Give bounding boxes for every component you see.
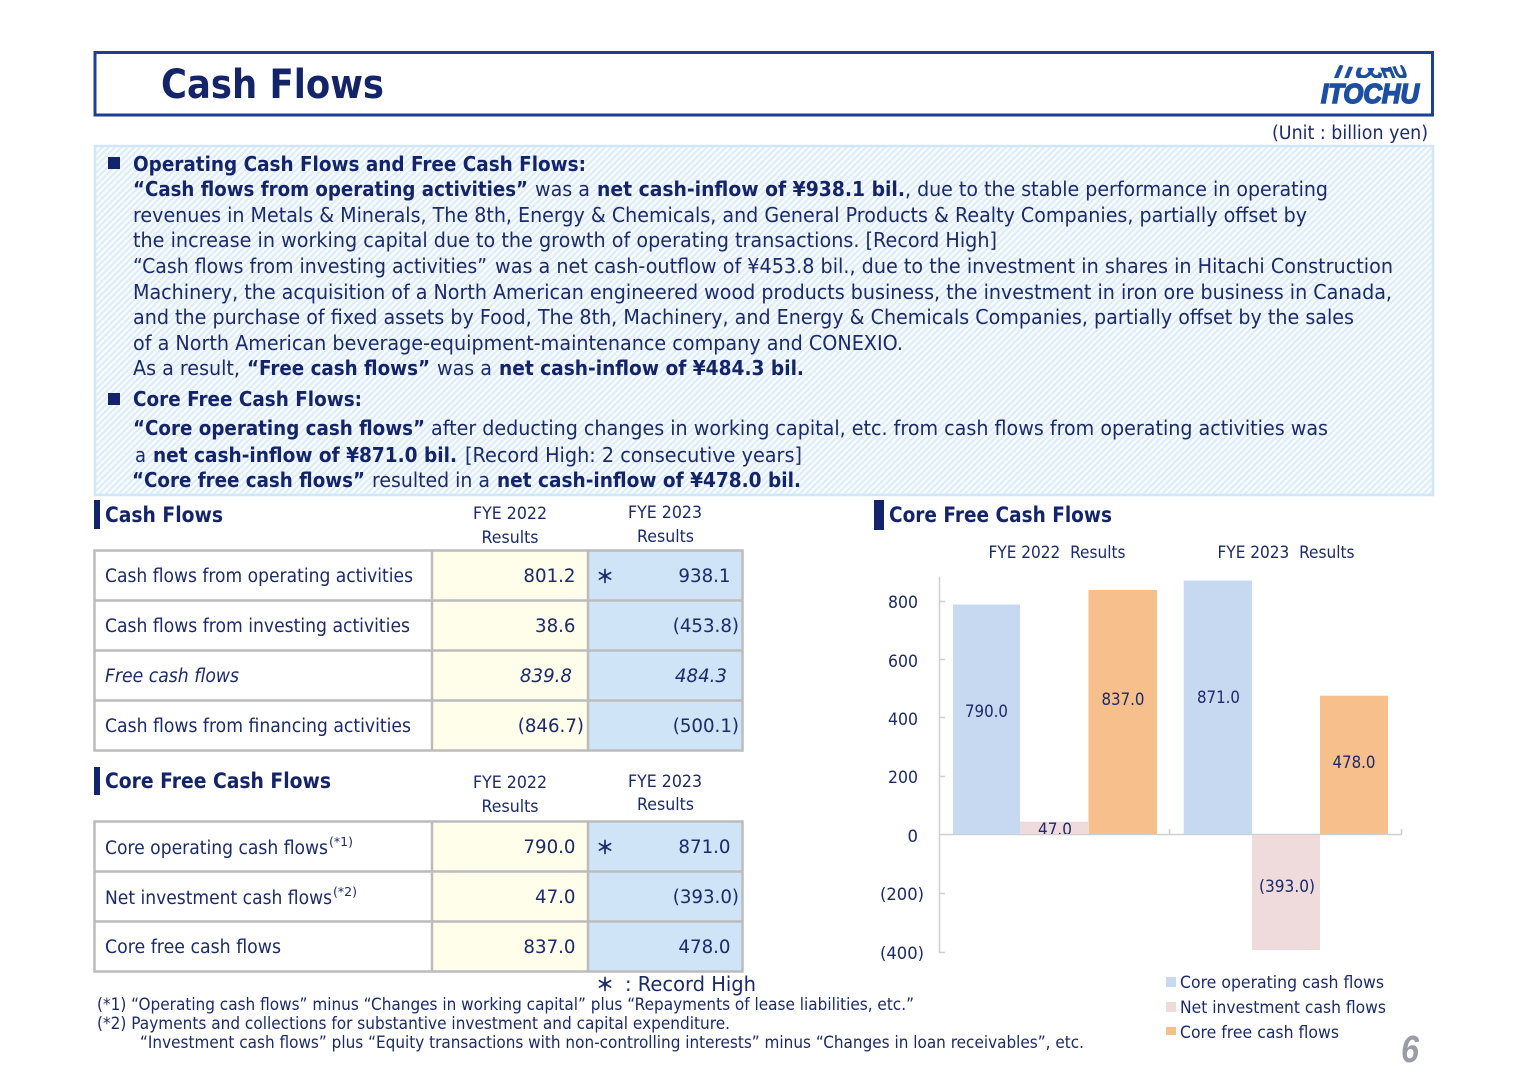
row: free cash flows: 839.8 [520,666,572,687]
row: operating: Cash flows from operating activities [105,566,413,587]
paragraph: core free cash flows: resulted in a [372,468,490,492]
logo: ITOCHU: ITO [1331,58,1379,84]
paragraph: operating and free cash flows: net cash-inflow of ¥938.1 bil. [597,177,905,201]
footnotes: “Investment cash flows” plus “Equity transactions with non-controlling interests” minus “Changes in loan receivables”, etc. [140,1033,1084,1052]
heading: operating and free cash flows: Operating Cash Flows and Free Cash Flows: [133,152,586,176]
paragraph: operating and free cash flows: of a North American beverage-equipment-maintenance company and CONEXIO. [133,331,903,355]
paragraph: operating and free cash flows: and the purchase of fixed assets by Food, The 8th, Machinery, and Energy & Chemicals Companies, partially offset by the sales [133,305,1354,329]
bar: FYE 2022 core free: 837.0 [1102,690,1144,709]
bar: FYE 2023 core operating: 871.0 [1197,688,1240,707]
column header: FYE 2022 [473,504,547,547]
row: operating [105,563,730,589]
paragraph: core free cash flows: after deducting changes in working capital, etc. from cash flows from operating activities was [431,416,1328,440]
row: investing: (453.8) [673,616,739,637]
bar: FYE 2023 core free: 478.0 [1332,753,1376,772]
bar: FYE 2023 net investment: (393.0) [1259,877,1315,896]
title banner [95,52,1432,115]
bar: FYE 2023 core free [1320,696,1388,834]
heading: cash flows table: Cash Flows [105,503,223,527]
column header: FYE 2022: FYE 2022 [473,773,547,792]
bar: FYE 2023 core operating [1184,580,1252,834]
row: free cash flows [105,666,727,687]
row: investing: Cash flows from investing activities [105,616,410,637]
row: core operating [105,834,730,860]
paragraph: operating and free cash flows: the increase in working capital due to the growth of operating transactions. [Record High] [133,228,997,252]
row: core operating: 790.0 [523,837,576,858]
panel: summary text [95,146,1433,495]
paragraph: operating and free cash flows: net cash-inflow of ¥484.3 bil. [499,356,804,380]
column header: FYE 2022: Results [482,528,538,547]
row: core operating: Core operating cash flows [105,838,328,859]
table: core free cash flows [94,821,743,972]
heading: core free cash flows: Core Free Cash Flows: [133,387,362,411]
footnotes: (*1) “Operating cash flows” minus “Changes in working capital” plus “Repayments of lease liabilities, etc.” [97,995,914,1014]
column header: FYE 2023 [628,772,702,814]
title: Cash Flows [161,62,384,108]
legend: core operating: Core operating cash flows [1180,973,1384,992]
column header: FYE 2023: FYE 2023 [628,772,702,791]
bar: FYE 2022 core operating [953,604,1020,834]
row: core free: 837.0 [523,937,576,958]
row: net investment: (393.0) [673,887,739,908]
legend: core free: Core free cash flows [1180,1023,1339,1042]
row: investing: 38.6 [535,616,576,637]
y axis: 400 [888,710,918,729]
column header: FYE 2023 [628,503,702,546]
paragraph: operating and free cash flows: revenues in Metals & Minerals, The 8th, Energy & Chemicals, and General Products & Realty Companies, partially offset by [133,203,1307,227]
row: core operating: ＊ [596,834,614,860]
row: core operating: 871.0 [678,837,730,858]
paragraph: operating and free cash flows: was a net cash-outflow of ¥453.8 bil., due to the investment in shares in Hitachi Construction [495,254,1393,278]
y axis [880,577,1402,963]
footnotes [97,995,1084,1052]
column header: FYE 2022: FYE 2022 [473,504,547,523]
y axis: (400) [880,944,924,963]
legend: net investment: Net investment cash flows [1180,998,1386,1017]
heading: core free cash flows chart [874,500,1112,530]
bar: FYE 2022 core free [1088,590,1157,834]
paragraph: core free cash flows: net cash-inflow of ¥478.0 bil. [497,468,801,492]
bar: FYE 2023 net investment [1252,835,1320,950]
record high note: ＊ [596,971,614,997]
logo: ITOCHU: ITOCHU [1321,78,1420,109]
table: cash flows [94,550,743,750]
heading: core free cash flows table: Core Free Cash Flows [105,769,331,793]
paragraph: operating and free cash flows: As a result, [133,356,240,380]
row: net investment: 47.0 [535,887,576,908]
row: financing [105,716,739,737]
row: net investment: (*2) [333,885,357,899]
heading: core free cash flows chart: Core Free Cash Flows [889,503,1112,527]
paragraph: core free cash flows: “Core free cash flows” [132,468,365,492]
row: investing [105,616,739,637]
row: net investment: Net investment cash flows [105,888,332,909]
paragraph: operating and free cash flows: was a [437,356,492,380]
bar: FYE 2022 net investment: 47.0 [1038,820,1072,839]
paragraph: operating and free cash flows [133,177,1393,380]
row: financing: Cash flows from financing activities [105,716,411,737]
column header: FYE 2022 [473,773,547,816]
y axis: 0 [908,827,918,846]
row: operating: ＊ [596,563,614,589]
row: net investment [105,885,739,909]
paragraph: core free cash flows: a [135,443,146,467]
paragraph: core free cash flows: [Record High: 2 consecutive years] [465,443,802,467]
column header: FYE 2022: Results [482,797,538,816]
row: core free: 478.0 [678,937,730,958]
category label: FYE 2022: FYE 2022 Results [988,543,1126,562]
row: financing: (846.7) [518,716,584,737]
y axis: 800 [888,593,918,612]
category label: FYE 2023: FYE 2023 Results [1218,543,1354,562]
paragraph: operating and free cash flows: “Cash flows from operating activities” [133,177,528,201]
column header: FYE 2023: Results [637,527,694,546]
legend [1166,973,1386,1042]
paragraph: operating and free cash flows: “Cash flows from investing activities” [133,254,487,278]
paragraph: core free cash flows [132,416,1328,492]
paragraph: operating and free cash flows: “Free cash flows” [247,356,430,380]
paragraph: core free cash flows: net cash-inflow of ¥871.0 bil. [153,443,457,467]
heading: cash flows table [94,500,223,529]
row: free cash flows: 484.3 [675,666,727,687]
row: operating: 801.2 [523,566,576,587]
logo: ITOCHU: CHU [1363,58,1411,84]
bar chart: core free cash flows [880,543,1402,963]
bullet [108,393,120,405]
record high note: : Record High [625,972,756,996]
y axis: 200 [888,768,918,787]
row: core free [105,937,730,958]
column header: FYE 2023: Results [637,795,694,814]
paragraph: operating and free cash flows: was a [535,177,590,201]
row: free cash flows: Free cash flows [105,666,239,687]
column header: FYE 2023: FYE 2023 [628,503,702,522]
row: core free: Core free cash flows [105,937,281,958]
row: core operating: (*1) [329,835,353,849]
row: operating: 938.1 [678,566,730,587]
y axis: (200) [880,885,924,904]
paragraph: operating and free cash flows: , due to the stable performance in operating [905,177,1328,201]
footnotes: (*2) Payments and collections for substantive investment and capital expenditure. [97,1014,730,1033]
y axis: 600 [888,652,918,671]
page number: 6 [1401,1029,1420,1071]
unit note: (Unit : billion yen) [1272,123,1428,144]
paragraph: operating and free cash flows: Machinery, the acquisition of a North American engineered wood products business, the investment in iron ore business in Canada, [133,280,1392,304]
bar: FYE 2022 net investment [1020,822,1088,834]
logo: ITOCHU [1320,65,1420,104]
bar: FYE 2022 core operating: 790.0 [965,702,1008,721]
row: financing: (500.1) [673,716,739,737]
paragraph: core free cash flows: “Core operating cash flows” [133,416,425,440]
bullet [108,157,120,169]
